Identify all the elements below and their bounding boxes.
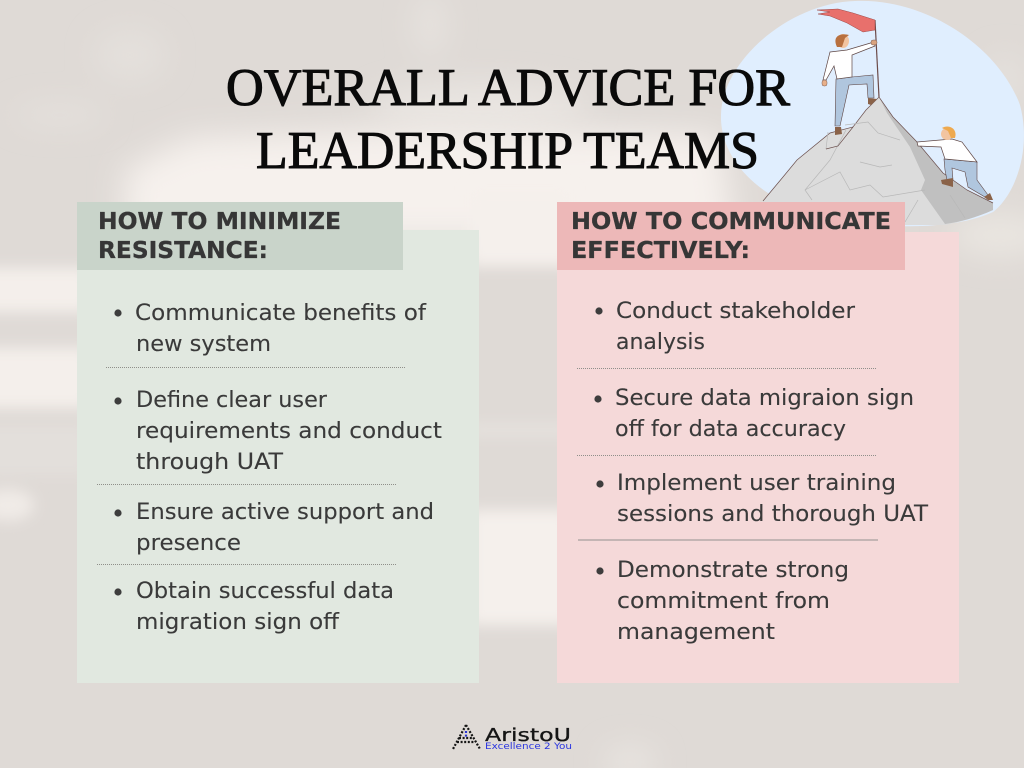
logo: AristoU bbox=[453, 725, 572, 752]
item: obtain data migration sign off bbox=[114, 578, 394, 635]
panel background bbox=[557, 232, 959, 683]
title: LEADERSHIP TEAMS bbox=[256, 122, 759, 180]
item: secure data migration sign off bbox=[594, 385, 914, 442]
item: ensure active support: presence bbox=[136, 530, 241, 556]
panel heading: EFFECTIVELY: bbox=[571, 238, 750, 264]
item: define clear user requirements: through UAT bbox=[136, 449, 283, 475]
item: stakeholder analysis bbox=[595, 298, 856, 355]
item: user training sessions bbox=[596, 470, 928, 527]
climber with flag bbox=[822, 34, 877, 135]
item: obtain data migration sign off: Obtain successful data bbox=[136, 578, 394, 604]
item: define clear user requirements bbox=[114, 387, 442, 475]
illustration: blue blob with climbers on a mountain bbox=[721, 1, 1024, 226]
item: define clear user requirements: requirements and conduct bbox=[136, 418, 442, 444]
item: commitment from management: management bbox=[617, 619, 775, 645]
item: stakeholder analysis: analysis bbox=[616, 329, 705, 355]
item: secure data migration sign off: off for data accuracy bbox=[615, 416, 846, 442]
logo tagline: Excellence 2 You bbox=[485, 742, 572, 752]
item: commitment from management: commitment from bbox=[617, 588, 830, 614]
panel heading bbox=[557, 202, 905, 270]
item: communicate benefits: new system bbox=[136, 331, 271, 357]
title: OVERALL ADVICE FOR bbox=[226, 59, 791, 117]
flag bbox=[817, 9, 879, 97]
panel: how to communicate effectively bbox=[557, 202, 959, 683]
panel: how to minimize resistance bbox=[77, 202, 479, 683]
panel background bbox=[77, 230, 479, 683]
item: user training sessions: sessions and thorough UAT bbox=[617, 501, 928, 527]
item: ensure active support bbox=[114, 499, 434, 556]
panel heading bbox=[77, 202, 403, 270]
item: define clear user requirements: Define clear user bbox=[136, 387, 328, 413]
item: user training sessions: Implement user training bbox=[617, 470, 896, 496]
item: obtain data migration sign off: migration sign off bbox=[136, 609, 339, 635]
item: secure data migration sign off: Secure data migraion sign bbox=[615, 385, 914, 411]
logo icon: dotted triangle bbox=[453, 725, 480, 749]
mountain bbox=[763, 97, 993, 225]
item: communicate benefits bbox=[114, 300, 427, 357]
title bbox=[226, 59, 791, 180]
panel heading: HOW TO COMMUNICATE bbox=[571, 209, 891, 235]
blue blob bbox=[721, 1, 1024, 226]
item: stakeholder analysis: Conduct stakeholder bbox=[616, 298, 856, 324]
logo name: AristoU bbox=[485, 725, 571, 746]
item: communicate benefits: Communicate benefits of bbox=[135, 300, 427, 326]
item: ensure active support: Ensure active support and bbox=[136, 499, 434, 525]
second climber bbox=[917, 126, 993, 200]
item: commitment from management bbox=[596, 557, 849, 645]
panel heading: RESISTANCE: bbox=[98, 238, 268, 264]
panel heading: HOW TO MINIMIZE bbox=[98, 209, 341, 235]
item: commitment from management: Demonstrate strong bbox=[617, 557, 849, 583]
